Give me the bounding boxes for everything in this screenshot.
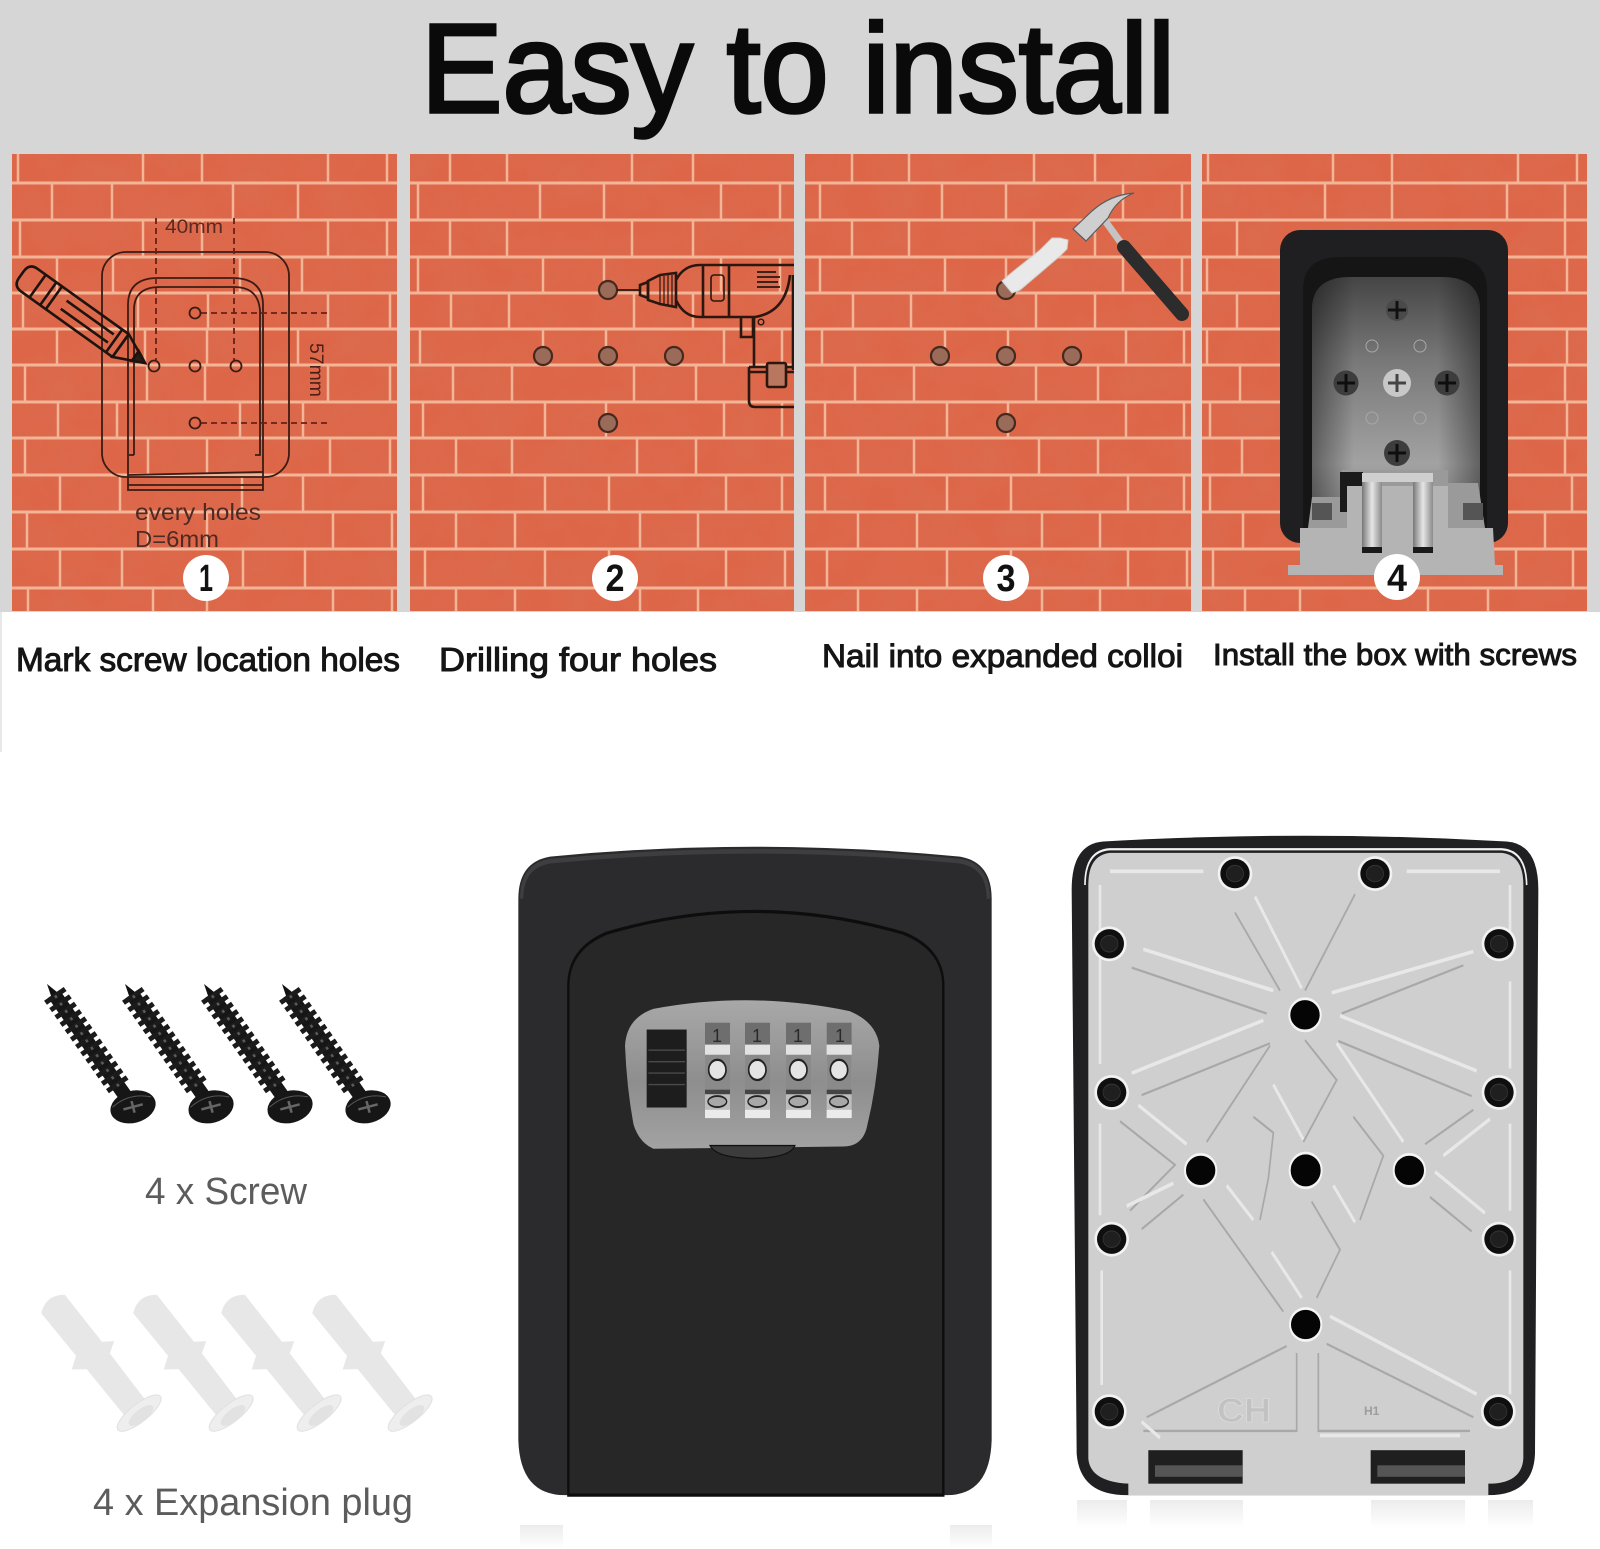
icon: screw 3 bbox=[182, 968, 325, 1141]
panel: step 2 drilling bbox=[410, 154, 800, 611]
reflection bbox=[1077, 1500, 1533, 1528]
lockbox front view bbox=[518, 847, 992, 1549]
step number 4: 4 bbox=[1387, 558, 1407, 600]
dial digits: 1 bbox=[793, 1026, 803, 1046]
dial digits: 1 bbox=[712, 1026, 722, 1046]
icon: pencil bbox=[13, 263, 153, 374]
dimension label 40mm: 40mm bbox=[165, 217, 223, 238]
icon: expansion plug bbox=[1002, 238, 1068, 293]
lockbox back view bbox=[1072, 836, 1538, 1528]
panel: step 4 install box bbox=[1202, 154, 1587, 611]
label: screws: 4 x Screw bbox=[145, 1171, 308, 1213]
step number 4 bbox=[1374, 554, 1420, 600]
icon: screw 4 bbox=[260, 968, 403, 1141]
step number 1 bbox=[183, 555, 229, 601]
title: Easy to install bbox=[421, 0, 1175, 139]
moulded ribs bbox=[1120, 894, 1473, 1431]
hole size note: D=6mm bbox=[135, 526, 219, 552]
drilled holes bbox=[931, 281, 1081, 432]
icon: drill bbox=[617, 265, 800, 407]
caption: step 4: Install the box with screws bbox=[1213, 637, 1577, 672]
icon: screw 2 bbox=[103, 968, 246, 1141]
embossed mark CH: CH bbox=[1217, 1392, 1271, 1430]
panel: step 1 mark holes bbox=[12, 154, 397, 611]
icon: screw 1 bbox=[25, 968, 168, 1141]
dimension label 57mm: 57mm bbox=[305, 343, 326, 397]
mounting holes bbox=[1185, 999, 1425, 1341]
header band bbox=[0, 0, 1600, 612]
box outline diagram bbox=[102, 218, 328, 490]
step number 3 bbox=[983, 555, 1029, 601]
hole size note: every holes bbox=[135, 499, 261, 525]
dial digits: 1 bbox=[835, 1026, 845, 1046]
bottom slots bbox=[1148, 1450, 1465, 1484]
step number 2 bbox=[592, 555, 638, 601]
embossed mark H1: H1 bbox=[1364, 1404, 1380, 1418]
icon: expansion plug 4 bbox=[299, 1283, 437, 1437]
hole size note bbox=[135, 499, 261, 552]
reflection bbox=[520, 1525, 992, 1549]
panel: step 3 nail plug bbox=[805, 154, 1191, 611]
drilled holes bbox=[534, 281, 683, 432]
step number 3: 3 bbox=[996, 558, 1016, 600]
icon: expansion plug 1 bbox=[28, 1283, 166, 1437]
lockbox open on wall bbox=[1280, 230, 1508, 575]
wall screws bbox=[1334, 299, 1460, 466]
dial digits bbox=[712, 1026, 845, 1046]
icon: expansion plug 3 bbox=[208, 1283, 346, 1437]
keypad window bbox=[625, 1000, 879, 1158]
rubber feet bbox=[1092, 856, 1516, 1429]
caption: step 3: Nail into expanded colloi bbox=[822, 638, 1183, 674]
caption: step 2: Drilling four holes bbox=[439, 641, 717, 678]
step number 2: 2 bbox=[606, 558, 624, 600]
caption: step 1: Mark screw location holes bbox=[16, 641, 400, 678]
icon: hammer bbox=[1073, 193, 1182, 314]
step number 1: 1 bbox=[199, 558, 213, 600]
dial digits: 1 bbox=[752, 1026, 762, 1046]
lock mechanism bbox=[1288, 470, 1503, 575]
label: expansion plugs: 4 x Expansion plug bbox=[93, 1482, 413, 1524]
icon: expansion plug 2 bbox=[120, 1283, 258, 1437]
